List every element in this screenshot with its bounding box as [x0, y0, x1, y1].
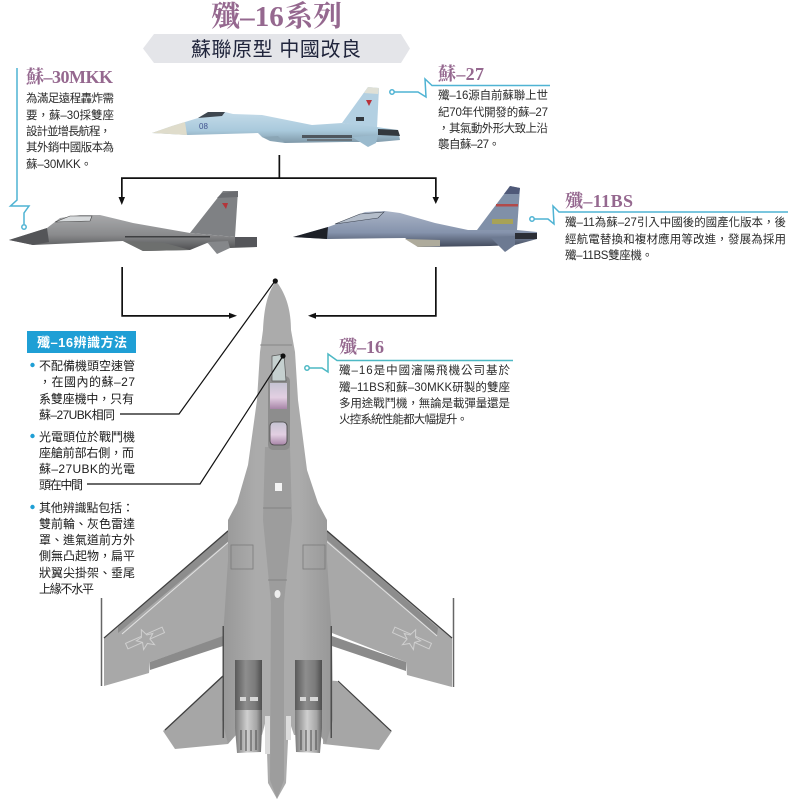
- bullet 3: 上緣不水平: [39, 582, 94, 596]
- central spine: [263, 447, 292, 799]
- tail boom edges: [222, 626, 332, 738]
- bullet 1: [30, 358, 135, 422]
- bullet 2: 座艙前部右側，而: [39, 445, 134, 460]
- aircraft: Su-27 side view: [152, 87, 400, 147]
- flow arrows: two-seaters to J-16: [121, 267, 437, 319]
- body: Su-27: 殲–16源自前蘇聯上世: [438, 88, 548, 102]
- bullet 1: 系雙座機中，只有: [39, 391, 134, 406]
- aircraft: Su-27 side view: 08: [199, 122, 208, 131]
- bullet 2: 光電頭位於戰鬥機: [39, 429, 135, 444]
- wing roundel left: [123, 622, 167, 655]
- callout heading: identification: [27, 331, 136, 353]
- body: J-11BS: 殲–11為蘇–27引入中國後的國產化版本，後: [565, 215, 786, 229]
- connector: J-16: [305, 354, 513, 372]
- heading: Su-30MKK: 蘇–30MKK: [26, 66, 113, 87]
- panel details: [231, 345, 325, 580]
- fuselage: [222, 281, 333, 799]
- leader line: electro-optical sensor: [87, 354, 285, 484]
- bullet 3: 狀翼尖掛架、垂尾: [39, 565, 135, 580]
- aircraft: J-16 top view: [102, 281, 454, 799]
- bullet 3: 其他辨識點包括：: [39, 500, 134, 515]
- aircraft: Su-30MKK side view: [9, 191, 257, 254]
- body: Su-30MKK: [26, 91, 114, 171]
- bullet 3: [30, 500, 135, 596]
- body: J-11BS: 經航電替換和複材應用等改進，發展為採用: [565, 232, 786, 246]
- heading: Su-27: 蘇–27: [438, 63, 484, 84]
- body: J-11BS: [565, 215, 786, 262]
- bullet list: identification points: [30, 358, 135, 596]
- bullet 2: 頭在中間: [39, 477, 83, 492]
- wings and tailplanes: [104, 530, 452, 750]
- panel: Su-27 text: [438, 63, 548, 151]
- canopy: [268, 354, 290, 450]
- body: Su-30MKK: 為滿足遠程轟炸需: [26, 91, 114, 105]
- body: J-16: 殲–16是中國瀋陽飛機公司基於: [339, 363, 510, 377]
- body: Su-27: 紀70年代開發的蘇–27: [438, 105, 548, 119]
- bullet 1: 不配備機頭空速管: [39, 358, 135, 373]
- bullet 3: 雙前輪、灰色雷達: [39, 516, 135, 531]
- connector: J-11BS: [530, 206, 788, 224]
- body: Su-30MKK: 其外銷中國版本為: [26, 140, 114, 154]
- engines: [235, 660, 322, 754]
- connector: Su-30MKK: [10, 68, 29, 229]
- subtitle banner: [143, 34, 410, 63]
- panel: Su-30MKK text: [26, 66, 114, 171]
- aircraft: J-11BS side view: [293, 186, 537, 252]
- bullet 3: 側無凸起物，扁平: [39, 548, 135, 563]
- bullet 1: 蘇–27UBK相同: [39, 408, 115, 422]
- body: J-16: 殲–11BS和蘇–30MKK研製的雙座: [339, 380, 510, 394]
- body: Su-27: 襲自蘇–27。: [438, 137, 500, 151]
- heading: J-11BS: 殲–11BS: [565, 191, 633, 211]
- leader line: nose pitot: [120, 279, 277, 414]
- bullet 3: 罩、進氣道前方外: [39, 532, 135, 547]
- body: Su-30MKK: 要，蘇–30採雙座: [26, 108, 114, 122]
- body: J-16: 火控系統性能都大幅提升。: [339, 412, 468, 426]
- body: Su-27: ，其氣動外形大致上沿: [438, 121, 548, 135]
- panel: J-16 text: [339, 337, 510, 426]
- title: 殲–16系列: [211, 0, 342, 33]
- leading edge slats: [118, 531, 438, 635]
- body: J-16: 多用途戰鬥機，無論是載彈量還是: [339, 396, 510, 410]
- wing roundel right: [390, 622, 434, 655]
- connector: Su-27: [390, 79, 550, 97]
- bullet 2: [30, 429, 135, 492]
- wing flaps: [150, 636, 406, 671]
- body: J-11BS: 殲–11BS雙座機。: [565, 248, 653, 262]
- body: Su-30MKK: 蘇–30MKK。: [26, 158, 92, 171]
- subtitle banner: 蘇聯原型 中國改良: [191, 38, 361, 61]
- bullet 1: ，在國內的蘇–27: [39, 374, 135, 389]
- bullet 2: 蘇–27UBK的光電: [39, 461, 135, 476]
- wingtip rails: [102, 598, 454, 687]
- body: Su-27: [438, 88, 548, 151]
- heading: J-16: 殲–16: [339, 337, 384, 357]
- body: Su-30MKK: 設計並增長航程，: [26, 124, 111, 138]
- body: J-16: [339, 363, 510, 426]
- panel: J-11BS text: [565, 191, 786, 262]
- flow arrows: Su-27 to two-seaters: [118, 155, 439, 205]
- callout heading: identification: 殲–16辨識方法: [37, 335, 127, 350]
